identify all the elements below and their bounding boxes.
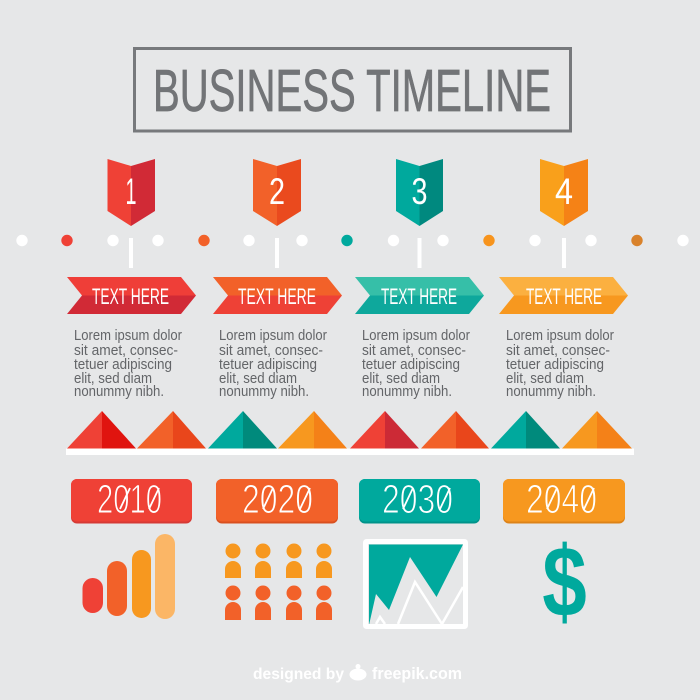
- icon: numbered shield 3: 3: [412, 171, 428, 212]
- ribbon 3: TEXT HERE: [381, 284, 457, 309]
- icon: numbered shield 2: 2: [269, 171, 285, 212]
- icon: numbered shield 4: 4: [555, 171, 573, 212]
- text block 1: elit, sed diam: [74, 371, 152, 387]
- icon: numbered shield 3: [396, 159, 443, 226]
- year badge 2020: 2020: [242, 476, 313, 522]
- icon: numbered shield 1: 1: [126, 171, 136, 212]
- text block 3: sit amet, consec-: [362, 343, 466, 359]
- ribbon 1: [67, 277, 196, 314]
- text block 2: tetuer adipiscing: [219, 357, 317, 373]
- text block 1: [74, 328, 182, 400]
- text block 4: elit, sed diam: [506, 371, 584, 387]
- text block 4: nonummy nibh.: [506, 384, 596, 400]
- year badge 2010: 2010: [97, 476, 162, 522]
- icon: dollar sign: $: [542, 527, 587, 638]
- text block 4: tetuer adipiscing: [506, 357, 604, 373]
- year badge 2030: 2030: [382, 476, 453, 522]
- text block 3: [362, 328, 470, 400]
- ribbon 2: [213, 277, 342, 314]
- text block 1: nonummy nibh.: [74, 384, 164, 400]
- icon: bar chart: [82, 534, 175, 619]
- white baseline bar: [66, 448, 634, 455]
- title: [134, 48, 570, 131]
- text block 2: nonummy nibh.: [219, 384, 309, 400]
- credit line: freepik.com: [372, 665, 462, 683]
- text block 3: tetuer adipiscing: [362, 357, 460, 373]
- text block 3: elit, sed diam: [362, 371, 440, 387]
- ribbon 1: TEXT HERE: [92, 284, 169, 309]
- timeline dots: [16, 235, 689, 246]
- text block 4: sit amet, consec-: [506, 343, 610, 359]
- triangle row: [67, 411, 632, 448]
- icon: numbered shield 1: [108, 159, 155, 226]
- year badge 2040: 2040: [526, 476, 597, 522]
- icon: numbered shield 2: [253, 159, 301, 226]
- ribbon 3: [355, 277, 484, 314]
- text block 2: Lorem ipsum dolor: [219, 328, 327, 344]
- icon: numbered shield 4: [540, 159, 588, 226]
- text block 1: sit amet, consec-: [74, 343, 178, 359]
- text block 2: sit amet, consec-: [219, 343, 323, 359]
- credit line: [253, 664, 462, 683]
- text block 2: elit, sed diam: [219, 371, 297, 387]
- icon: area chart in frame: [366, 542, 466, 626]
- ribbon 2: TEXT HERE: [238, 284, 316, 309]
- text block 4: Lorem ipsum dolor: [506, 328, 614, 344]
- text block 4: [506, 328, 614, 400]
- icon: people grid: [225, 544, 332, 620]
- text block 1: tetuer adipiscing: [74, 357, 172, 373]
- credit line: designed by: [253, 666, 344, 683]
- text block 3: nonummy nibh.: [362, 384, 452, 400]
- ribbon 4: TEXT HERE: [526, 284, 602, 309]
- connector lines: [129, 238, 566, 268]
- text block 2: [219, 328, 327, 400]
- text block 1: Lorem ipsum dolor: [74, 328, 182, 344]
- text block 3: Lorem ipsum dolor: [362, 328, 470, 344]
- ribbon 4: [499, 277, 628, 314]
